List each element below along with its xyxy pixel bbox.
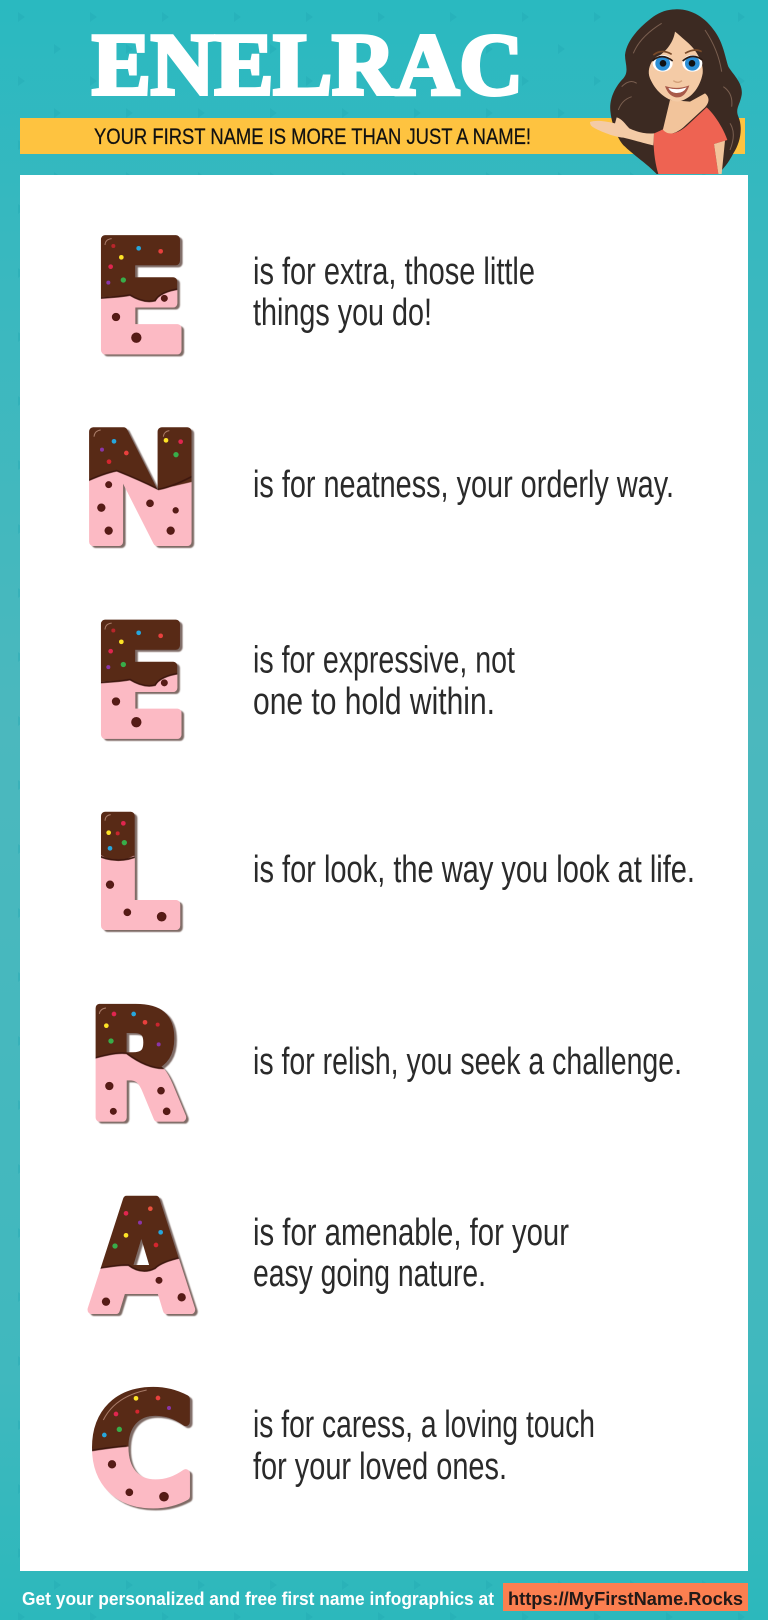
text: C line: for your loved ones. (253, 1446, 507, 1488)
text: E line: things you do! (253, 292, 432, 334)
footer link badge: https://MyFirstName.Rocks (508, 1589, 743, 1609)
text: C line (253, 1404, 595, 1488)
text: E line: one to hold within. (253, 681, 495, 723)
icon: chocolate letter E: E (92, 593, 188, 770)
text: C line: is for caress, a loving touch (253, 1404, 595, 1446)
row: letter E (extra) (92, 209, 535, 386)
text: A line: is for amenable, for your (253, 1212, 569, 1254)
row: letter R (relish) (88, 979, 682, 1153)
title: ENELRAC (92, 17, 523, 114)
row: letter C (caress) (89, 1364, 595, 1538)
icon: chocolate letter L: L (92, 787, 180, 962)
footer link badge (503, 1583, 748, 1611)
text: E line (253, 640, 515, 723)
illustration: woman presenting (590, 9, 742, 174)
row: letter N (neatness) (80, 402, 674, 578)
icon: chocolate letter R: R (88, 979, 185, 1153)
text: E line (253, 251, 535, 334)
text: E line: is for expressive, not (253, 640, 515, 682)
text: E line: is for extra, those little (253, 251, 535, 293)
banner: YOUR FIRST NAME IS MORE THAN JUST A NAME! (94, 124, 531, 149)
icon: chocolate letter N: N (80, 402, 201, 578)
footer (22, 1583, 748, 1611)
text: A line (253, 1212, 569, 1295)
banner (20, 118, 745, 154)
row: letter A (amenable) (91, 1171, 569, 1346)
text: A line: easy going nature. (253, 1253, 486, 1295)
row: letter E (expressive) (92, 593, 515, 770)
icon: chocolate letter C: C (89, 1364, 195, 1538)
icon: chocolate letter E: E (92, 209, 188, 386)
row: letter L (look) (92, 787, 695, 962)
footer call to action: Get your personalized and free first name infographics at (22, 1589, 494, 1609)
icon: chocolate letter A: A (91, 1171, 192, 1346)
